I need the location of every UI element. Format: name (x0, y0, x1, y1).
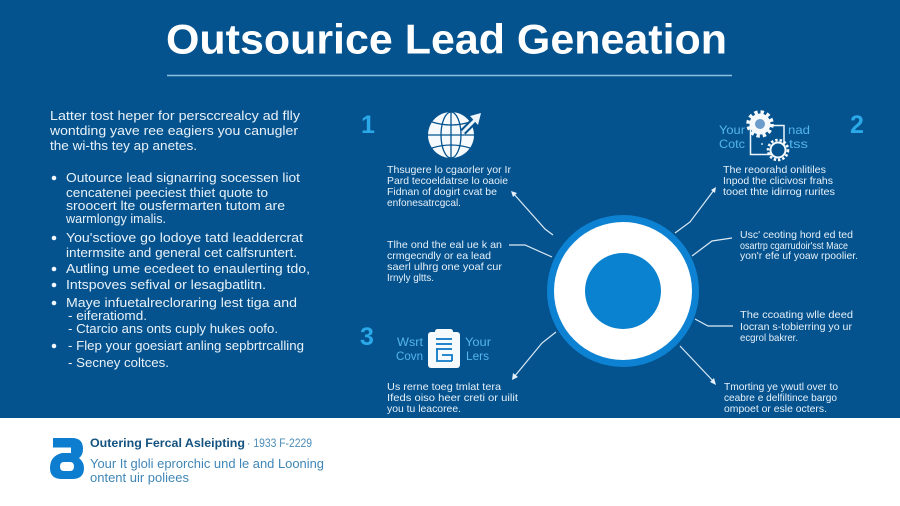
footer text: · 1933 F-2229 (247, 436, 312, 450)
icon: clipboard (396, 329, 491, 368)
text block: item 3 (387, 381, 518, 415)
text block: item 3: Us rerne toeg tmlat tera (387, 381, 501, 393)
text block: bullet list (52, 170, 310, 370)
text block: item 6: ecgrol bakrer. (740, 332, 798, 344)
text block: bullet list: Intspoves sefival or lesagbatlitn. (66, 277, 266, 292)
text block: bullet list: cencatenei peeciest thiet quote to (66, 185, 268, 200)
text block: item 4: The reoorahd onlitiles (723, 164, 826, 176)
text block: bullet list: Maye infuetalrecloraring lest tiga and (66, 295, 297, 310)
text block: bullet list: - Secney coltces. (68, 355, 169, 370)
text block: bullet list: - Flep your goesiart anling sepbrtrcalling (68, 338, 304, 353)
icon: gear and flow: nad (788, 123, 810, 137)
footer text: ontent uir poliees (90, 471, 189, 485)
text block: bullet list: Autling ume ecedeet to enaulerting tdo, (66, 261, 310, 276)
text block: item 7: ompoet or esle octers. (724, 403, 827, 415)
text block: bullet list: sroocert lte ousfermarten tutom are (66, 198, 285, 213)
text block: item 2 (387, 239, 503, 284)
footer logo (50, 438, 84, 479)
icon: gear and flow: Your (719, 123, 745, 137)
icon: clipboard: Wsrt (397, 335, 424, 349)
text block: item 6: The ccoating wlle deed (740, 309, 853, 321)
text block: item 2: saerl ulhrg one yoaf cur (387, 261, 503, 273)
text block: item 5 (740, 229, 858, 262)
footer text (90, 436, 324, 485)
text block: intro: Latter tost heper for persccrealcy ad flly (50, 108, 301, 123)
text block: item 6: Iocran s-tobierring yo ur (740, 321, 852, 333)
icon: clipboard: Lers (466, 349, 489, 363)
text block: intro (49, 108, 301, 153)
text block: item 6 (740, 309, 853, 344)
text block: item 1: Thsugere lo cgaorler yor Ir (387, 164, 512, 176)
icon: clipboard: Covn (396, 349, 423, 363)
icon: globe with arrow (428, 112, 481, 158)
text block: item 4: tooet thte idirrog rurites (723, 186, 835, 198)
text block: item 5: yon'r efe uf yoaw rpoolier. (740, 250, 858, 262)
central circle (547, 215, 699, 367)
text block: bullet list: - eiferatiomd. (68, 308, 147, 323)
number 3: 3 (360, 323, 374, 351)
title: Outsourice Lead Geneation (166, 16, 727, 62)
text block: item 3: Ifeds oiso heer creti or uilit (387, 392, 518, 404)
text block: intro: wontding yave ree eagiers you canugler (49, 123, 299, 138)
text block: item 1: Fidnan of dogirt cvat be (387, 186, 497, 198)
text block: item 2: Irnyly gltts. (387, 272, 434, 284)
number 2: 2 (850, 111, 864, 139)
icon: gear and flow (719, 112, 810, 160)
text block: bullet list: - Ctarcio ans onts cuply hukes oofo. (68, 321, 278, 336)
text block: item 4: Inpod the clicivosr frahs (723, 175, 833, 187)
icon: gear and flow: Cotc (719, 137, 745, 151)
text block: bullet list: intermsite and general cet calfsruntert. (66, 245, 297, 260)
text block: bullet list: Outource lead signarring socessen liot (66, 170, 300, 185)
text block: bullet list: You'sctiove go lodoye tatd leaddercrat (66, 230, 303, 245)
text block: item 4 (723, 164, 835, 198)
text block: item 1: enfonesatrcgcal. (387, 197, 461, 209)
text block: item 2: crmgecndly or ea lead (387, 250, 491, 262)
footer text: Your It gloli eprorchic und le and Looning (90, 457, 324, 471)
arrows: connectors from central circle (509, 187, 733, 385)
text block: item 7: Tmorting ye ywutl over to (724, 381, 838, 393)
text block: intro: the wi-ths tey ap anetes. (50, 138, 197, 153)
text block: item 5: Usc' ceoting hord ed ted (740, 229, 853, 241)
text block: item 5: osartrp cgarrudoir'sst Mace (740, 240, 848, 252)
number 1: 1 (361, 111, 375, 139)
icon: gear and flow: tss (789, 137, 808, 151)
footer text: Outering Fercal Asleipting (90, 436, 245, 450)
text block: item 1: Pard tecoeldatrse lo oaoie (387, 175, 508, 187)
text block: item 7 (724, 381, 838, 415)
text block: item 2: Tlhe ond the eal ue k an (387, 239, 502, 251)
text block: item 1 (387, 164, 512, 209)
icon: clipboard: Your (465, 335, 491, 349)
text block: item 3: you tu leacoree. (387, 403, 461, 415)
footer band (0, 418, 900, 506)
text block: bullet list: warmlongy imalis. (65, 211, 166, 226)
text block: item 7: ceabre e delfiltince bargo (724, 392, 837, 404)
